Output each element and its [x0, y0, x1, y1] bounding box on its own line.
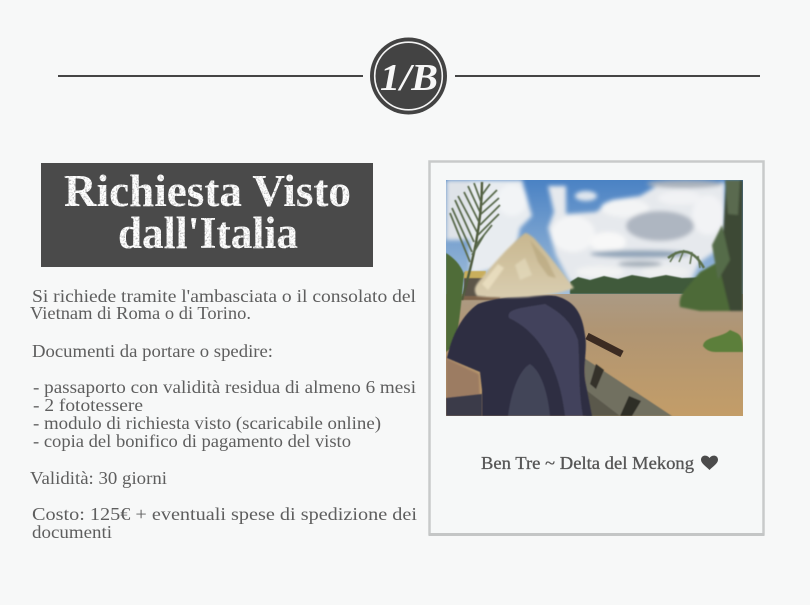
- badge: 1/B: [370, 38, 447, 114]
- far tree line: [569, 274, 697, 294]
- header divider right: [455, 75, 760, 77]
- conical hat: [475, 233, 574, 298]
- oar: [587, 336, 622, 354]
- text block: visa request details: - 2 fototessere: [33, 395, 143, 415]
- icon: heart: [701, 456, 718, 470]
- text block: visa request details: - modulo di richiesta visto (scaricabile online): [33, 413, 381, 434]
- floating plants: [703, 330, 743, 352]
- river: [446, 294, 743, 416]
- heading: dall'Italia: dall'Italia: [118, 208, 298, 258]
- text block: visa request details: Vietnam di Roma o di Torino.: [30, 303, 251, 323]
- riverside hut: [462, 270, 500, 300]
- page canvas: [30, 38, 765, 538]
- arm: [446, 358, 480, 400]
- text block: visa request details: Validità: 30 giorni: [30, 468, 167, 488]
- text block: visa request details: documenti: [32, 522, 112, 542]
- shirt: [447, 295, 592, 416]
- badge: 1/B: 1/B: [380, 57, 438, 99]
- panel: polaroid frame: [429, 162, 764, 536]
- clouds: [446, 180, 725, 282]
- heading: dall'Italia: dall'Italia: [118, 208, 298, 258]
- wooden boat: [584, 358, 672, 416]
- text block: visa request details: - copia del bonifico di pagamento del visto: [33, 431, 351, 451]
- panel: title banner: [41, 163, 373, 267]
- text block: visa request details: [30, 286, 417, 542]
- text block: visa request details: - passaporto con validità residua di almeno 6 mesi: [33, 377, 416, 397]
- text block: visa request details: Documenti da portare o spedire:: [32, 341, 273, 361]
- right bank trees: [680, 180, 743, 311]
- photo: Mekong delta boat scene: [446, 180, 743, 416]
- palm frond right: [668, 250, 704, 268]
- caption: Ben Tre ~ Delta del Mekong: [481, 453, 694, 473]
- text block: visa request details: Si richiede tramite l'ambasciata o il consolato del: [32, 286, 416, 306]
- heading: Richiesta Visto: Richiesta Visto: [64, 166, 351, 216]
- text block: visa request details: Costo: 125€ + eventuali spese di spedizione dei: [32, 504, 417, 524]
- header divider left: [58, 75, 363, 77]
- palm tree: [450, 182, 500, 300]
- heading: Richiesta Visto: Richiesta Visto: [64, 166, 351, 216]
